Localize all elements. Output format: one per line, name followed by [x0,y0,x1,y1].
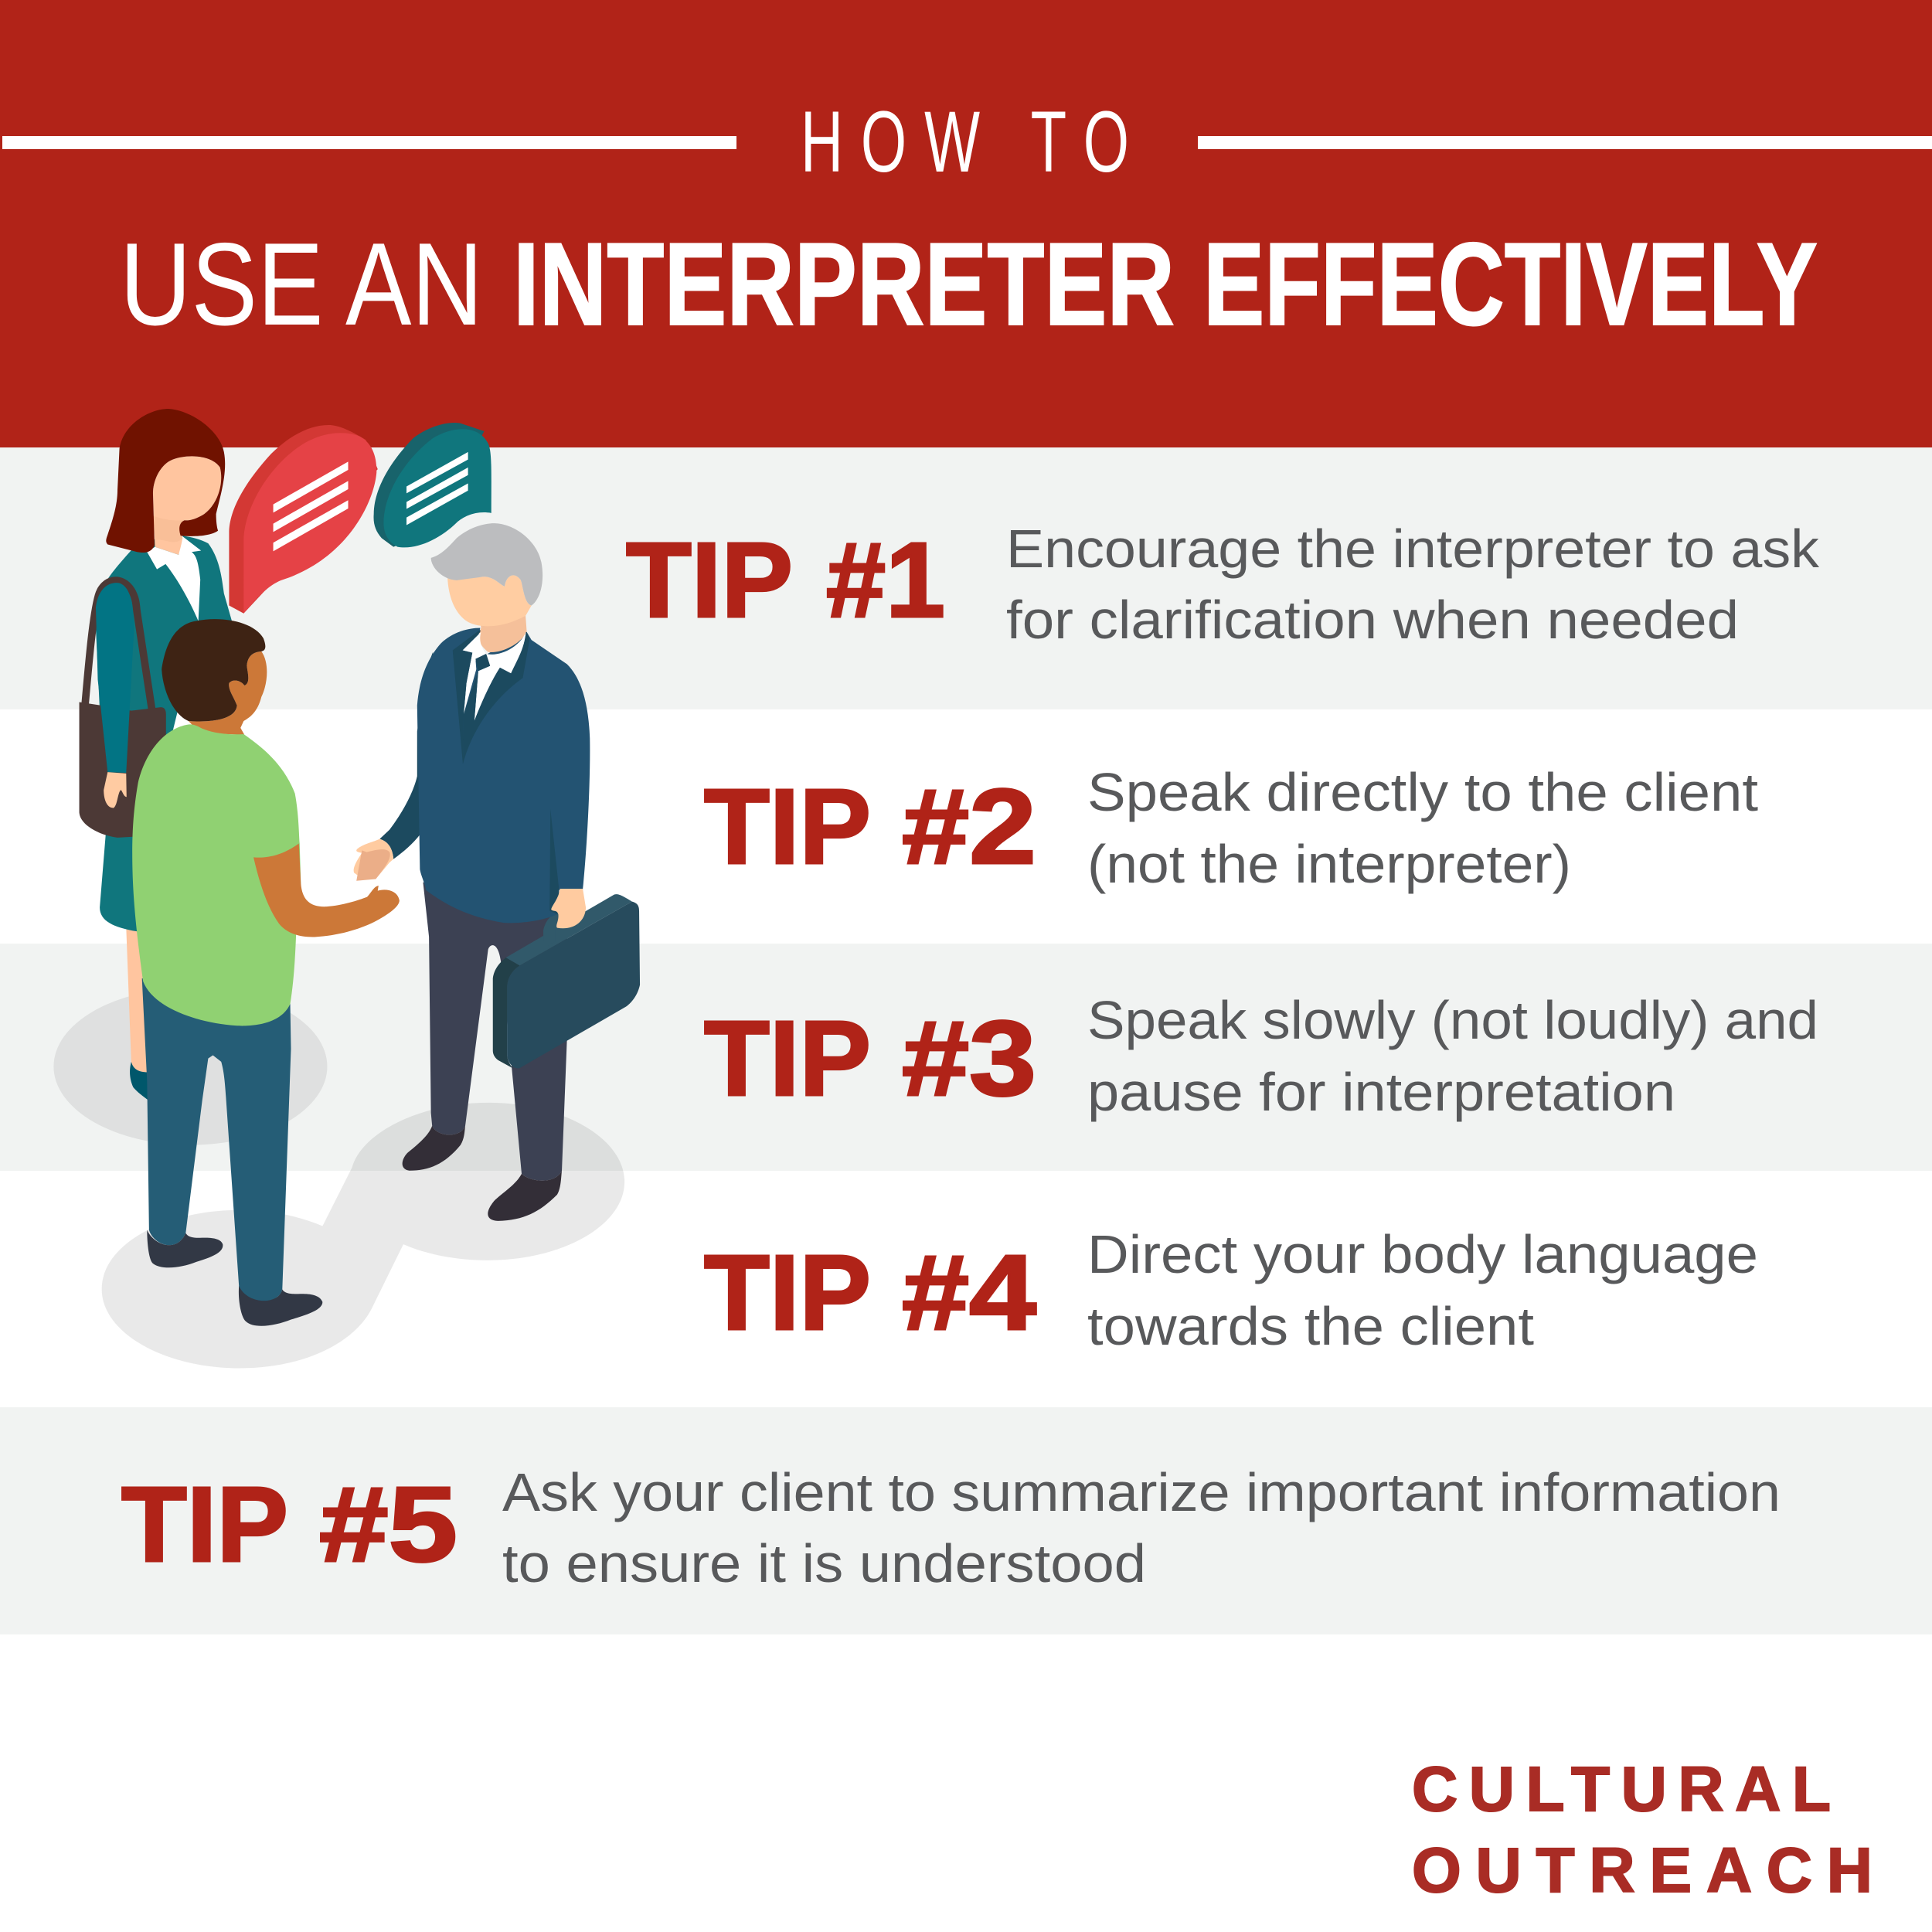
figure: man in suit with briefcase [354,523,640,1221]
tip 3: pause for interpretation [1087,1062,1675,1122]
tip 3: #3 [902,999,1036,1118]
tip 3: Speak slowly (not loudly) and [1087,990,1818,1050]
tip 1: TIP [626,521,793,640]
tip 1: Encourage the interpreter to ask [1006,519,1820,579]
row background: tip 5 [0,1407,1932,1634]
tip 3 [704,990,1818,1122]
figure: man in green shirt [132,619,400,1326]
tip 4: TIP [704,1233,871,1352]
tip 2: TIP [704,767,871,886]
heading rule right [1198,136,1932,149]
title [120,219,1818,350]
tip 1 [626,519,1820,650]
tip 4: towards the client [1087,1296,1534,1356]
figure: woman with bag [80,409,232,1100]
logo: Cultural Outreach [1412,1754,1872,1906]
tip 3: TIP [704,999,871,1118]
tip 5: #5 [319,1465,457,1584]
tip 2: Speak directly to the client [1087,762,1758,822]
tip 2: (not the interpreter) [1087,834,1571,894]
row background: tip 1 [0,447,1932,709]
heading rule left [2,136,736,149]
tip 2 [704,762,1758,894]
tip 1: #1 [826,521,945,640]
tip 1: for clarification when needed [1006,590,1739,650]
tip 4 [704,1224,1758,1356]
speech bubble: teal [373,423,492,547]
logo: Cultural Outreach: CULTURAL [1412,1754,1831,1825]
header band [0,0,1932,447]
tip 4: Direct your body language [1087,1224,1758,1284]
briefcase [493,894,640,1069]
logo: Cultural Outreach: OUTREACH [1412,1835,1872,1906]
row background: tip 3 [0,944,1932,1171]
tip 4: #4 [902,1233,1036,1352]
illustration: floor shadows [53,988,327,1145]
speech bubble: red [229,425,378,614]
tip 2: #2 [902,767,1036,886]
tip 5: Ask your client to summarize important information [502,1462,1781,1522]
illustration: shared floor shadow [102,1103,624,1369]
tip 5: to ensure it is understood [502,1533,1146,1594]
tip 5: TIP [121,1465,288,1584]
heading: how to: HOW TO [801,94,1129,191]
title: USE AN [120,219,483,350]
tip 5 [121,1462,1781,1594]
title: INTERPRETER [513,219,1175,350]
